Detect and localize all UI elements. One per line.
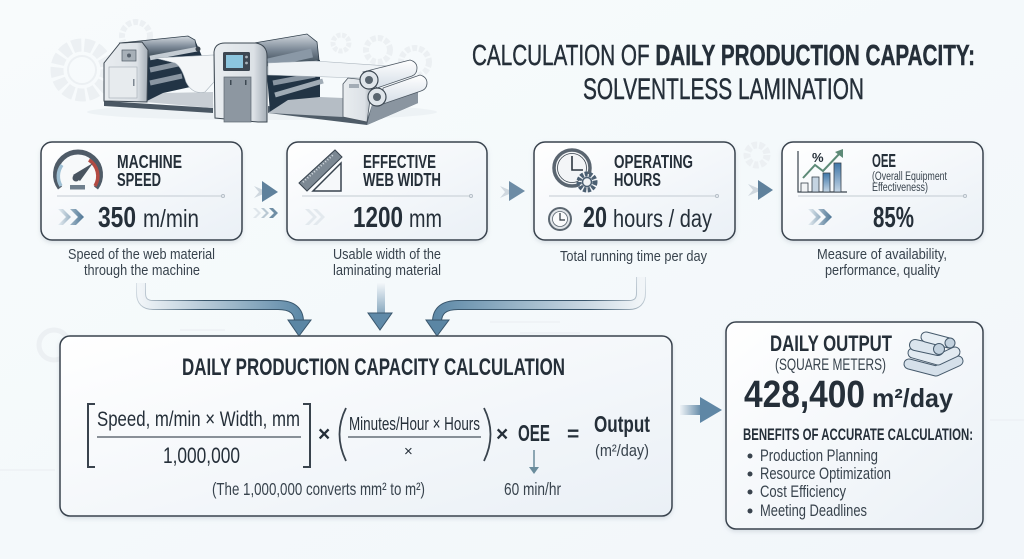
panel: operating hours: hours / day	[613, 205, 712, 233]
icon: speed gauge	[56, 152, 100, 190]
icon: rising bar chart	[798, 149, 847, 192]
left housing	[104, 42, 148, 102]
panel: calculation	[60, 336, 672, 516]
arrow: width to hours	[500, 181, 525, 201]
center housing	[214, 43, 267, 122]
panel: operating hours: OPERATING	[614, 152, 693, 172]
description: machine speed	[68, 246, 215, 279]
description: web width	[333, 246, 441, 279]
description: web width: Usable width of the	[333, 246, 441, 263]
note: (The 1,000,000 converts mm² to m²)	[212, 479, 425, 499]
title	[472, 40, 975, 106]
benefits list: Production Planning	[760, 446, 878, 465]
panel: daily output: (SQUARE METERS)	[775, 355, 886, 374]
panel: machine speed: MACHINE	[117, 152, 182, 172]
heading: DAILY PRODUCTION CAPACITY CALCULATION	[182, 354, 565, 381]
panel: effective web width	[287, 142, 487, 240]
panel: machine speed: 350	[98, 202, 136, 234]
icon: chevrons	[305, 209, 325, 225]
panel: calculation: 60 min/hr	[504, 479, 561, 499]
panel: OEE: 85%	[873, 202, 914, 234]
panel: OEE	[782, 142, 983, 240]
formula: Speed, m/min × Width, mm	[97, 408, 300, 431]
icon: rising bar chart: %	[812, 150, 824, 165]
description: OEE	[817, 246, 947, 279]
panel: daily output	[726, 322, 983, 529]
icon: small clock	[549, 208, 571, 230]
panel: machine speed	[41, 142, 242, 240]
panel: operating hours: HOURS	[614, 170, 661, 190]
panel: daily output: DAILY OUTPUT	[770, 331, 892, 356]
title: SOLVENTLESS LAMINATION	[583, 73, 864, 106]
panel: machine speed: m/min	[143, 205, 199, 233]
icon: chevrons	[58, 209, 84, 225]
benefits list: Resource Optimization	[760, 464, 891, 483]
arrow: hours to OEE	[748, 180, 773, 200]
benefits list: Cost Efficiency	[760, 482, 846, 501]
panel: daily output: m²/day	[872, 383, 954, 413]
panel: operating hours	[534, 142, 735, 240]
left base	[104, 101, 213, 113]
machine illustration	[87, 34, 437, 125]
panel: machine speed: SPEED	[117, 170, 161, 190]
arrow: speed to calculation	[141, 283, 311, 336]
panel: daily output: 428,400	[744, 374, 865, 416]
formula: ×	[496, 423, 508, 446]
description: machine speed: through the machine	[84, 262, 200, 279]
panel: effective web width: EFFECTIVE	[363, 152, 436, 172]
formula: ×	[404, 443, 413, 460]
arrow: width to calculation	[368, 283, 392, 330]
icon: ruler and set square	[299, 150, 342, 191]
description: machine speed: Speed of the web material	[68, 246, 215, 263]
benefits list: Meeting Deadlines	[760, 501, 867, 520]
web sheet	[268, 61, 388, 78]
arrow: hours to calculation	[426, 277, 641, 336]
icon: chevrons	[808, 209, 832, 225]
panel: OEE: OEE	[872, 151, 896, 171]
panel: effective web width: mm	[409, 205, 442, 233]
description: web width: laminating material	[333, 262, 441, 279]
right base and interior	[268, 90, 418, 125]
right rollers and stand	[343, 60, 427, 125]
description: OEE: performance, quality	[825, 262, 940, 279]
formula	[88, 404, 650, 474]
formula: =	[567, 423, 579, 446]
formula: Minutes/Hour × Hours	[349, 414, 480, 434]
icon: clock with gear	[554, 150, 595, 190]
benefits list	[743, 425, 973, 520]
formula: ×	[318, 423, 330, 446]
description: operating hours: Total running time per day	[560, 248, 707, 265]
formula: OEE	[518, 420, 550, 446]
panel: operating hours: 20	[583, 202, 607, 234]
panel: OEE: (Overall Equipment	[872, 171, 948, 183]
formula: Output	[594, 411, 650, 437]
panel: effective web width: 1200	[353, 202, 403, 234]
panel: effective web width: WEB WIDTH	[363, 170, 441, 190]
arrow: speed to width	[253, 181, 278, 218]
arrow: calculation to output	[680, 397, 722, 423]
formula: 1,000,000	[163, 443, 240, 468]
icon: stacked rolls	[909, 337, 958, 371]
formula: (m²/day)	[595, 441, 649, 460]
description: OEE: Measure of availability,	[817, 246, 947, 263]
panel: OEE: Effectiveness)	[872, 182, 928, 194]
